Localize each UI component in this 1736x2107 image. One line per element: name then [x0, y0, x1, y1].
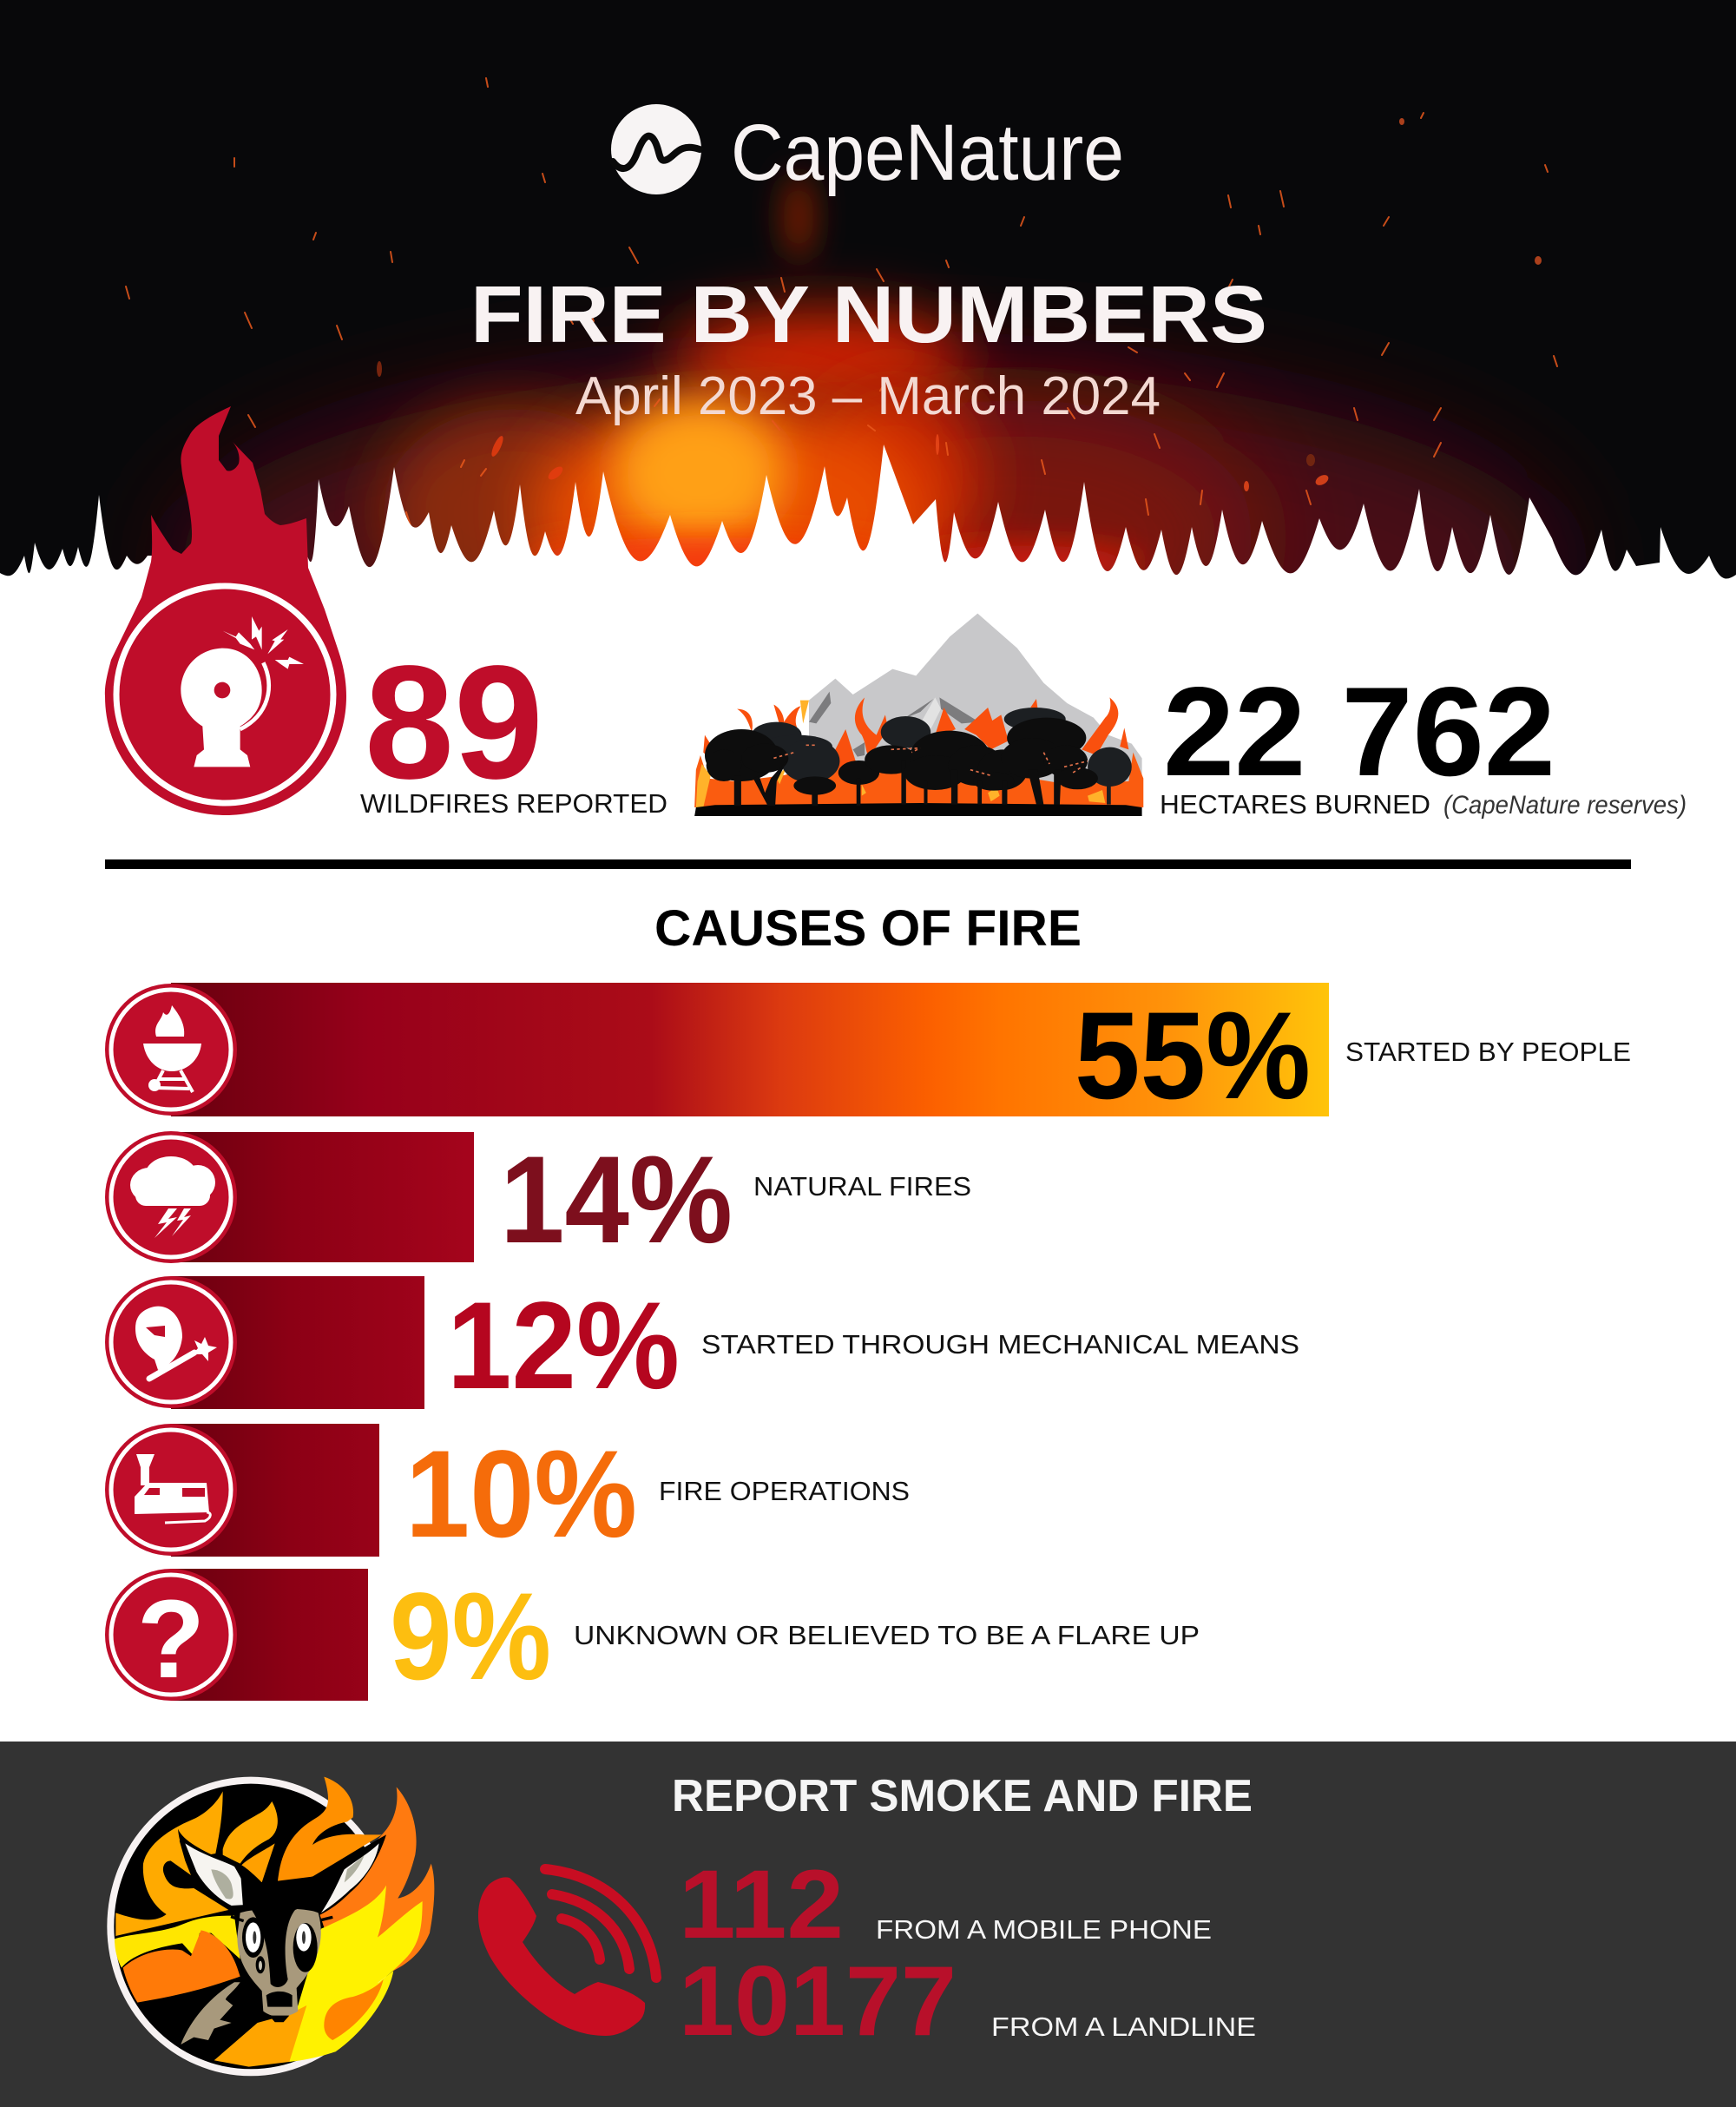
icon: question mark: ?	[137, 1577, 205, 1702]
bar row: fire operations 10%: FIRE OPERATIONS	[659, 1476, 910, 1506]
stat: wildfires reported	[360, 633, 667, 819]
panel: fire header background	[0, 0, 1736, 578]
white page edge with flame silhouette	[0, 444, 1736, 625]
subtitle: date range: April 2023 – March 2024	[575, 366, 1161, 426]
bar row: natural fires 14%	[105, 1131, 971, 1269]
bar row: mechanical means 12%: 12%	[447, 1277, 680, 1415]
phone number: 112 mobile: 112	[679, 1850, 844, 1959]
bar row: mechanical means 12%: STARTED THROUGH MECHANICAL MEANS	[701, 1329, 1299, 1360]
stat: wildfires reported: 89	[365, 633, 543, 813]
bar row: unknown or flare up 9%: 9%	[390, 1568, 551, 1706]
icon: braai grill	[143, 1005, 201, 1092]
bar row: started by people 55%: STARTED BY PEOPLE	[1345, 1037, 1631, 1067]
logo: CapeNature	[611, 104, 1124, 197]
phone number: 10177 landline	[679, 1946, 1256, 2057]
bar row: fire operations 10%: 10%	[405, 1426, 637, 1564]
stat: hectares burned: 22 762	[1163, 661, 1555, 802]
embers	[126, 78, 1557, 532]
bar row: natural fires 14%: NATURAL FIRES	[753, 1171, 971, 1202]
phone number: 10177 landline: 10177	[679, 1946, 957, 2057]
bar row: mechanical means 12%	[105, 1276, 1299, 1415]
icon: fire truck	[135, 1454, 210, 1523]
bar row: unknown or flare up 9%	[105, 1568, 1200, 1706]
icon: flame with alarm bell	[105, 406, 346, 815]
stat: wildfires reported: WILDFIRES REPORTED	[360, 788, 667, 819]
bar row: fire operations 10%	[105, 1424, 910, 1564]
bar row: started by people 55%	[105, 983, 1631, 1125]
icon: telephone with signal arcs	[478, 1869, 656, 2036]
bar row: unknown or flare up 9%: UNKNOWN OR BELIEVED TO BE A FLARE UP	[574, 1620, 1200, 1650]
stat: hectares burned	[1160, 661, 1687, 820]
bar row: natural fires 14%: 14%	[500, 1131, 733, 1269]
stat: hectares burned: (CapeNature reserves)	[1443, 791, 1687, 820]
logo wordmark: CapeNature	[731, 109, 1124, 197]
icon: welder with torch	[135, 1307, 217, 1379]
logo icon	[611, 104, 701, 194]
icon: buck head in flames	[107, 1777, 434, 2076]
heading: causes of fire: CAUSES OF FIRE	[654, 900, 1082, 957]
title: FIRE BY NUMBERS	[470, 269, 1267, 359]
phone number: 10177 landline: FROM A LANDLINE	[991, 2012, 1256, 2042]
phone number: 112 mobile	[679, 1850, 1212, 1959]
stat: hectares burned: HECTARES BURNED	[1160, 789, 1430, 820]
icon: burning mountain and trees	[694, 614, 1143, 816]
phone number: 112 mobile: FROM A MOBILE PHONE	[876, 1914, 1212, 1945]
bar row: started by people 55%: 55%	[1075, 987, 1311, 1125]
heading: report smoke and fire: REPORT SMOKE AND FIRE	[672, 1771, 1253, 1821]
icon: storm cloud	[130, 1156, 215, 1238]
bell icon	[181, 616, 304, 767]
panel: report smoke and fire footer	[0, 1742, 1736, 2107]
